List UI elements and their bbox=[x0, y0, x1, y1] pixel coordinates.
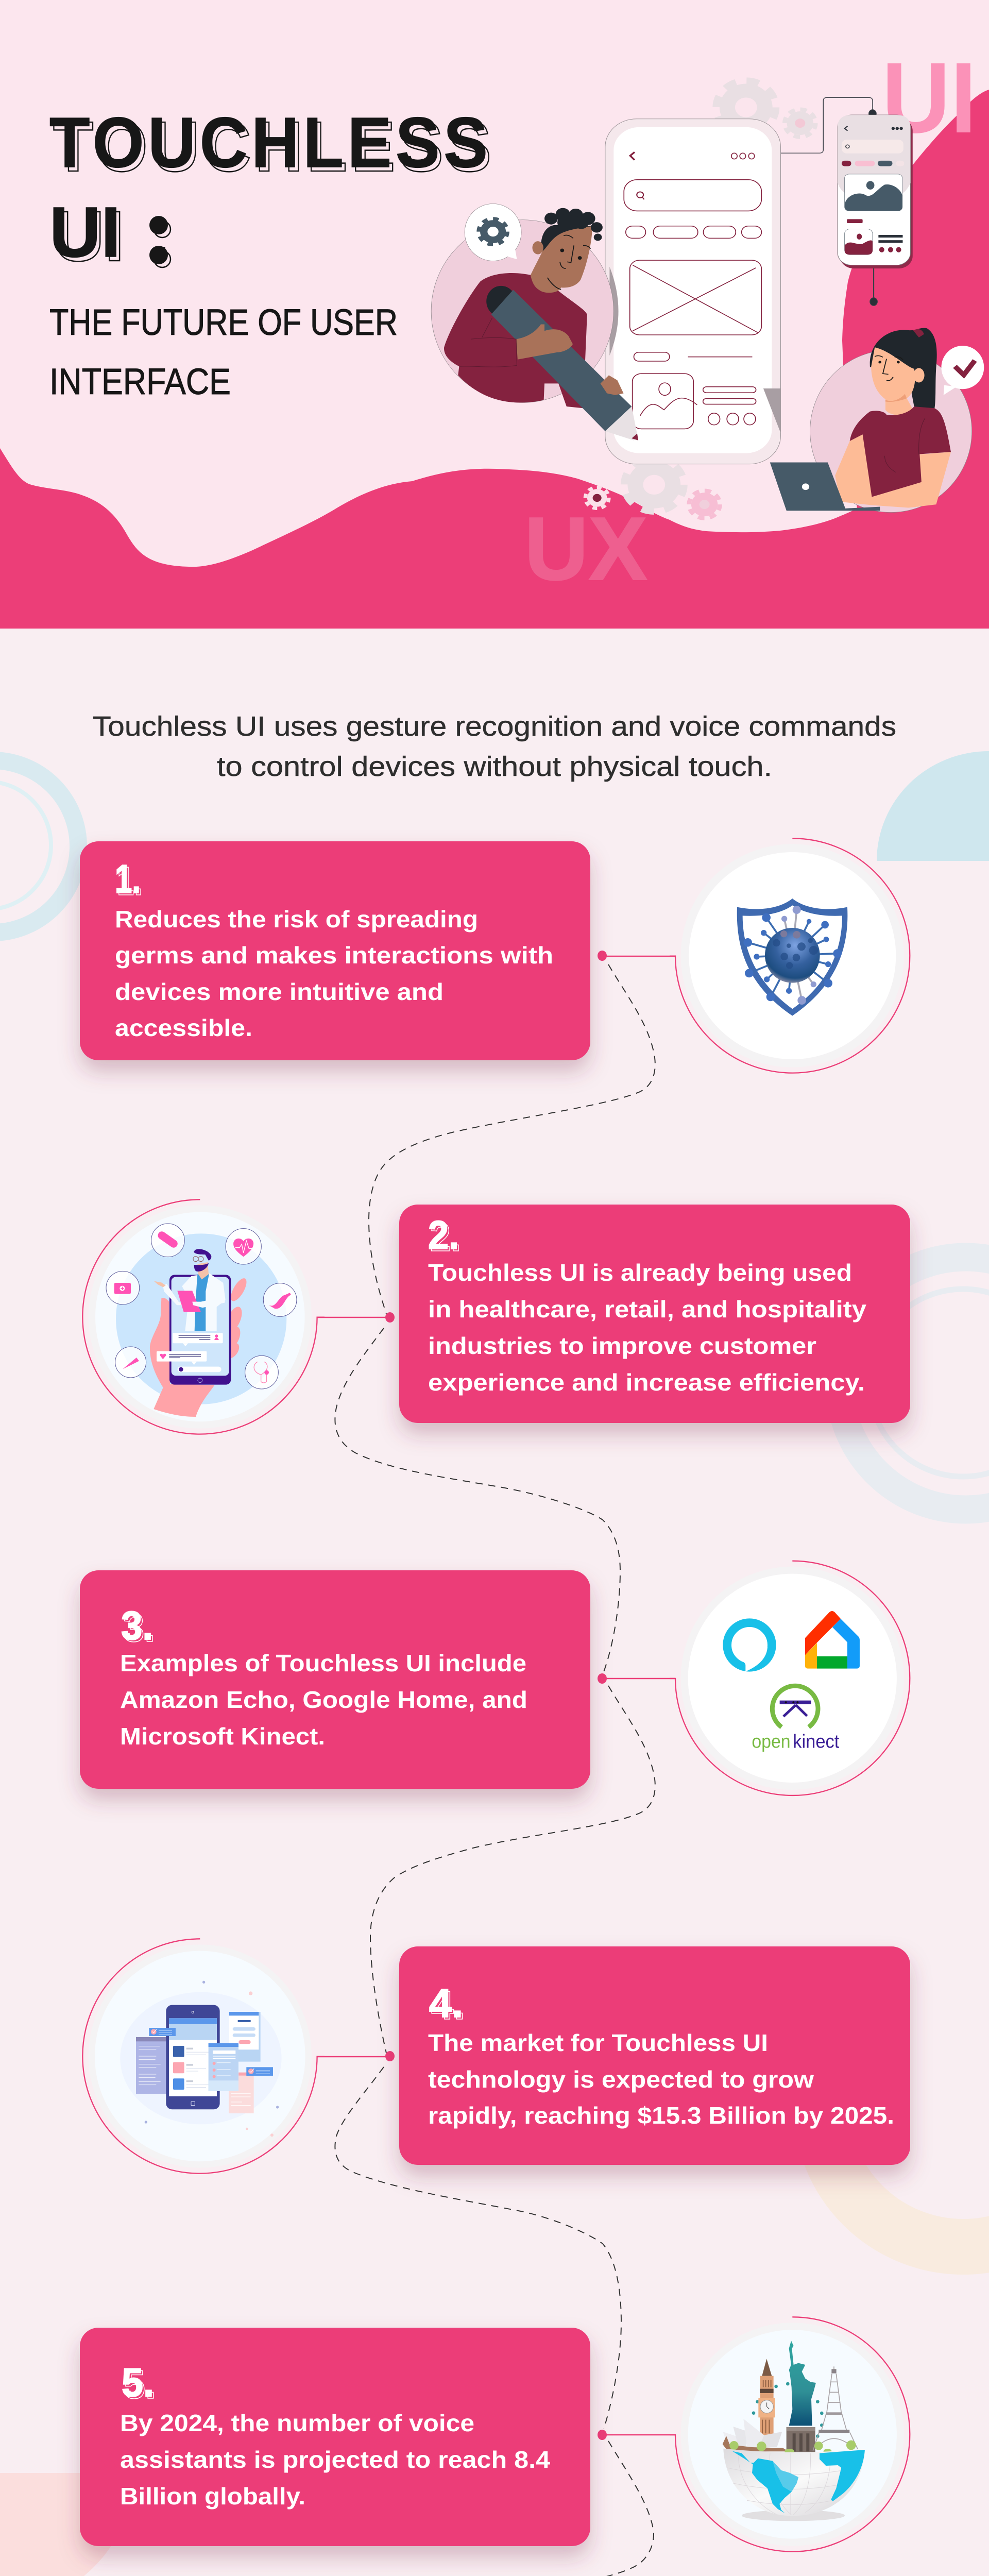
title: touchless: TOUCHLESS bbox=[49, 103, 492, 182]
pink panel bbox=[229, 2073, 254, 2113]
card 4: 4. bbox=[429, 1980, 463, 2026]
intro text: Touchless UI uses gesture recognition and voice commands bbox=[93, 711, 896, 742]
card 1: devices more intuitive and bbox=[115, 978, 444, 1005]
icon: settings gear bubble bbox=[479, 219, 507, 245]
eiffel tower bbox=[813, 2366, 858, 2451]
logo: openkinect: kinect bbox=[793, 1731, 840, 1752]
card 5: 5. bbox=[122, 2360, 154, 2405]
globe bowl bbox=[723, 2449, 865, 2516]
circle 5: world landmarks on globe bbox=[670, 2317, 910, 2552]
man with pencil bbox=[431, 204, 638, 440]
card 2: 2. bbox=[428, 1212, 459, 1258]
card 5: 5. bbox=[124, 2362, 156, 2407]
card 5: Billion globally. bbox=[120, 2483, 305, 2510]
circle 4: mobile app screens bbox=[82, 1939, 325, 2174]
card 3 bbox=[80, 1570, 590, 1789]
card 1 bbox=[80, 841, 590, 1060]
card 4: 4. bbox=[431, 1982, 465, 2028]
title: UI colon: : bbox=[148, 193, 172, 272]
card 1: Reduces the risk of spreading bbox=[115, 906, 478, 933]
icon: shield bbox=[737, 899, 847, 1016]
notification tags bbox=[149, 2028, 273, 2076]
card 2 bbox=[399, 1205, 910, 1423]
laptop bbox=[770, 463, 880, 511]
card 1: accessible. bbox=[115, 1014, 252, 1041]
circle 1: virus shield bbox=[670, 838, 910, 1073]
logo: openkinect: open bbox=[752, 1731, 791, 1752]
card 4: rapidly, reaching $15.3 Billion by 2025. bbox=[428, 2102, 894, 2129]
chat bubbles bbox=[157, 1333, 223, 1372]
logo: google home bbox=[805, 1611, 860, 1669]
hero panel bbox=[0, 0, 989, 629]
card 3: 3. bbox=[121, 1603, 153, 1648]
card 2: Touchless UI is already being used bbox=[428, 1259, 852, 1286]
icon: virus bbox=[743, 906, 842, 1005]
title: UI colon: UI bbox=[53, 197, 124, 276]
logo: alexa ring bbox=[727, 1623, 772, 1671]
title: touchless: TOUCHLESS bbox=[53, 107, 496, 187]
card 3: Examples of Touchless UI include bbox=[120, 1650, 526, 1676]
card 4: technology is expected to grow bbox=[428, 2066, 814, 2093]
card 2: industries to improve customer bbox=[428, 1332, 816, 1359]
hand holding phone bbox=[150, 1276, 249, 1417]
phone bbox=[169, 1275, 231, 1385]
icon: check mark bbox=[955, 361, 975, 375]
opera house bbox=[723, 2419, 789, 2451]
card 3: Microsoft Kinect. bbox=[120, 1723, 325, 1750]
UI watermark: UI bbox=[882, 42, 977, 154]
trees bbox=[729, 2441, 856, 2454]
center list panel bbox=[209, 2043, 238, 2091]
circle 2: telehealth doctor on phone bbox=[82, 1199, 325, 1434]
woman at laptop bbox=[770, 328, 984, 512]
intro text bbox=[93, 711, 896, 782]
phone app screen bbox=[166, 2005, 220, 2109]
small phone app screen bbox=[838, 115, 913, 268]
statue of liberty bbox=[787, 2341, 816, 2452]
card 2: experience and increase efficiency. bbox=[428, 1369, 865, 1396]
large phone wireframe bbox=[605, 119, 780, 464]
subtitle: THE FUTURE OF USER bbox=[49, 302, 398, 343]
card 5: assistants is projected to reach 8.4 bbox=[120, 2446, 550, 2473]
ferris wheel dots bbox=[752, 2382, 824, 2438]
card 1: 1. bbox=[117, 858, 143, 904]
hero illustration bbox=[431, 81, 984, 518]
right login panel bbox=[229, 2012, 261, 2062]
title: UI colon: UI bbox=[49, 193, 121, 272]
connector lines bbox=[780, 97, 877, 306]
card 3: 3. bbox=[123, 1605, 155, 1650]
pink wave bbox=[0, 90, 989, 629]
left code panel bbox=[136, 2037, 168, 2094]
intro text: to control devices without physical touch. bbox=[217, 751, 772, 782]
health icons bbox=[106, 1224, 297, 1389]
gears bbox=[585, 81, 815, 518]
decorative background shapes bbox=[0, 751, 989, 2576]
card 4 bbox=[399, 1946, 910, 2165]
card 2: 2. bbox=[430, 1214, 461, 1260]
card 3: Amazon Echo, Google Home, and bbox=[120, 1686, 527, 1713]
card 1: germs and makes interactions with bbox=[115, 942, 553, 969]
UX watermark: UX bbox=[524, 498, 647, 599]
dashed timeline path bbox=[335, 964, 655, 2576]
subtitle bbox=[49, 302, 398, 402]
title: UI colon bbox=[49, 193, 172, 276]
card 2: in healthcare, retail, and hospitality bbox=[428, 1296, 866, 1323]
card 1: 1. bbox=[115, 856, 141, 902]
circle 3: product logos bbox=[670, 1561, 910, 1795]
card 5 bbox=[80, 2328, 590, 2546]
subtitle: INTERFACE bbox=[49, 362, 231, 402]
hero background bbox=[0, 0, 989, 629]
big ben bbox=[758, 2359, 775, 2435]
connectors and dots bbox=[317, 951, 675, 2576]
card 5: By 2024, the number of voice bbox=[120, 2410, 474, 2436]
logo: openkinect bbox=[752, 1686, 840, 1752]
doctor bbox=[154, 1249, 226, 1331]
card 4: The market for Touchless UI bbox=[428, 2029, 768, 2056]
